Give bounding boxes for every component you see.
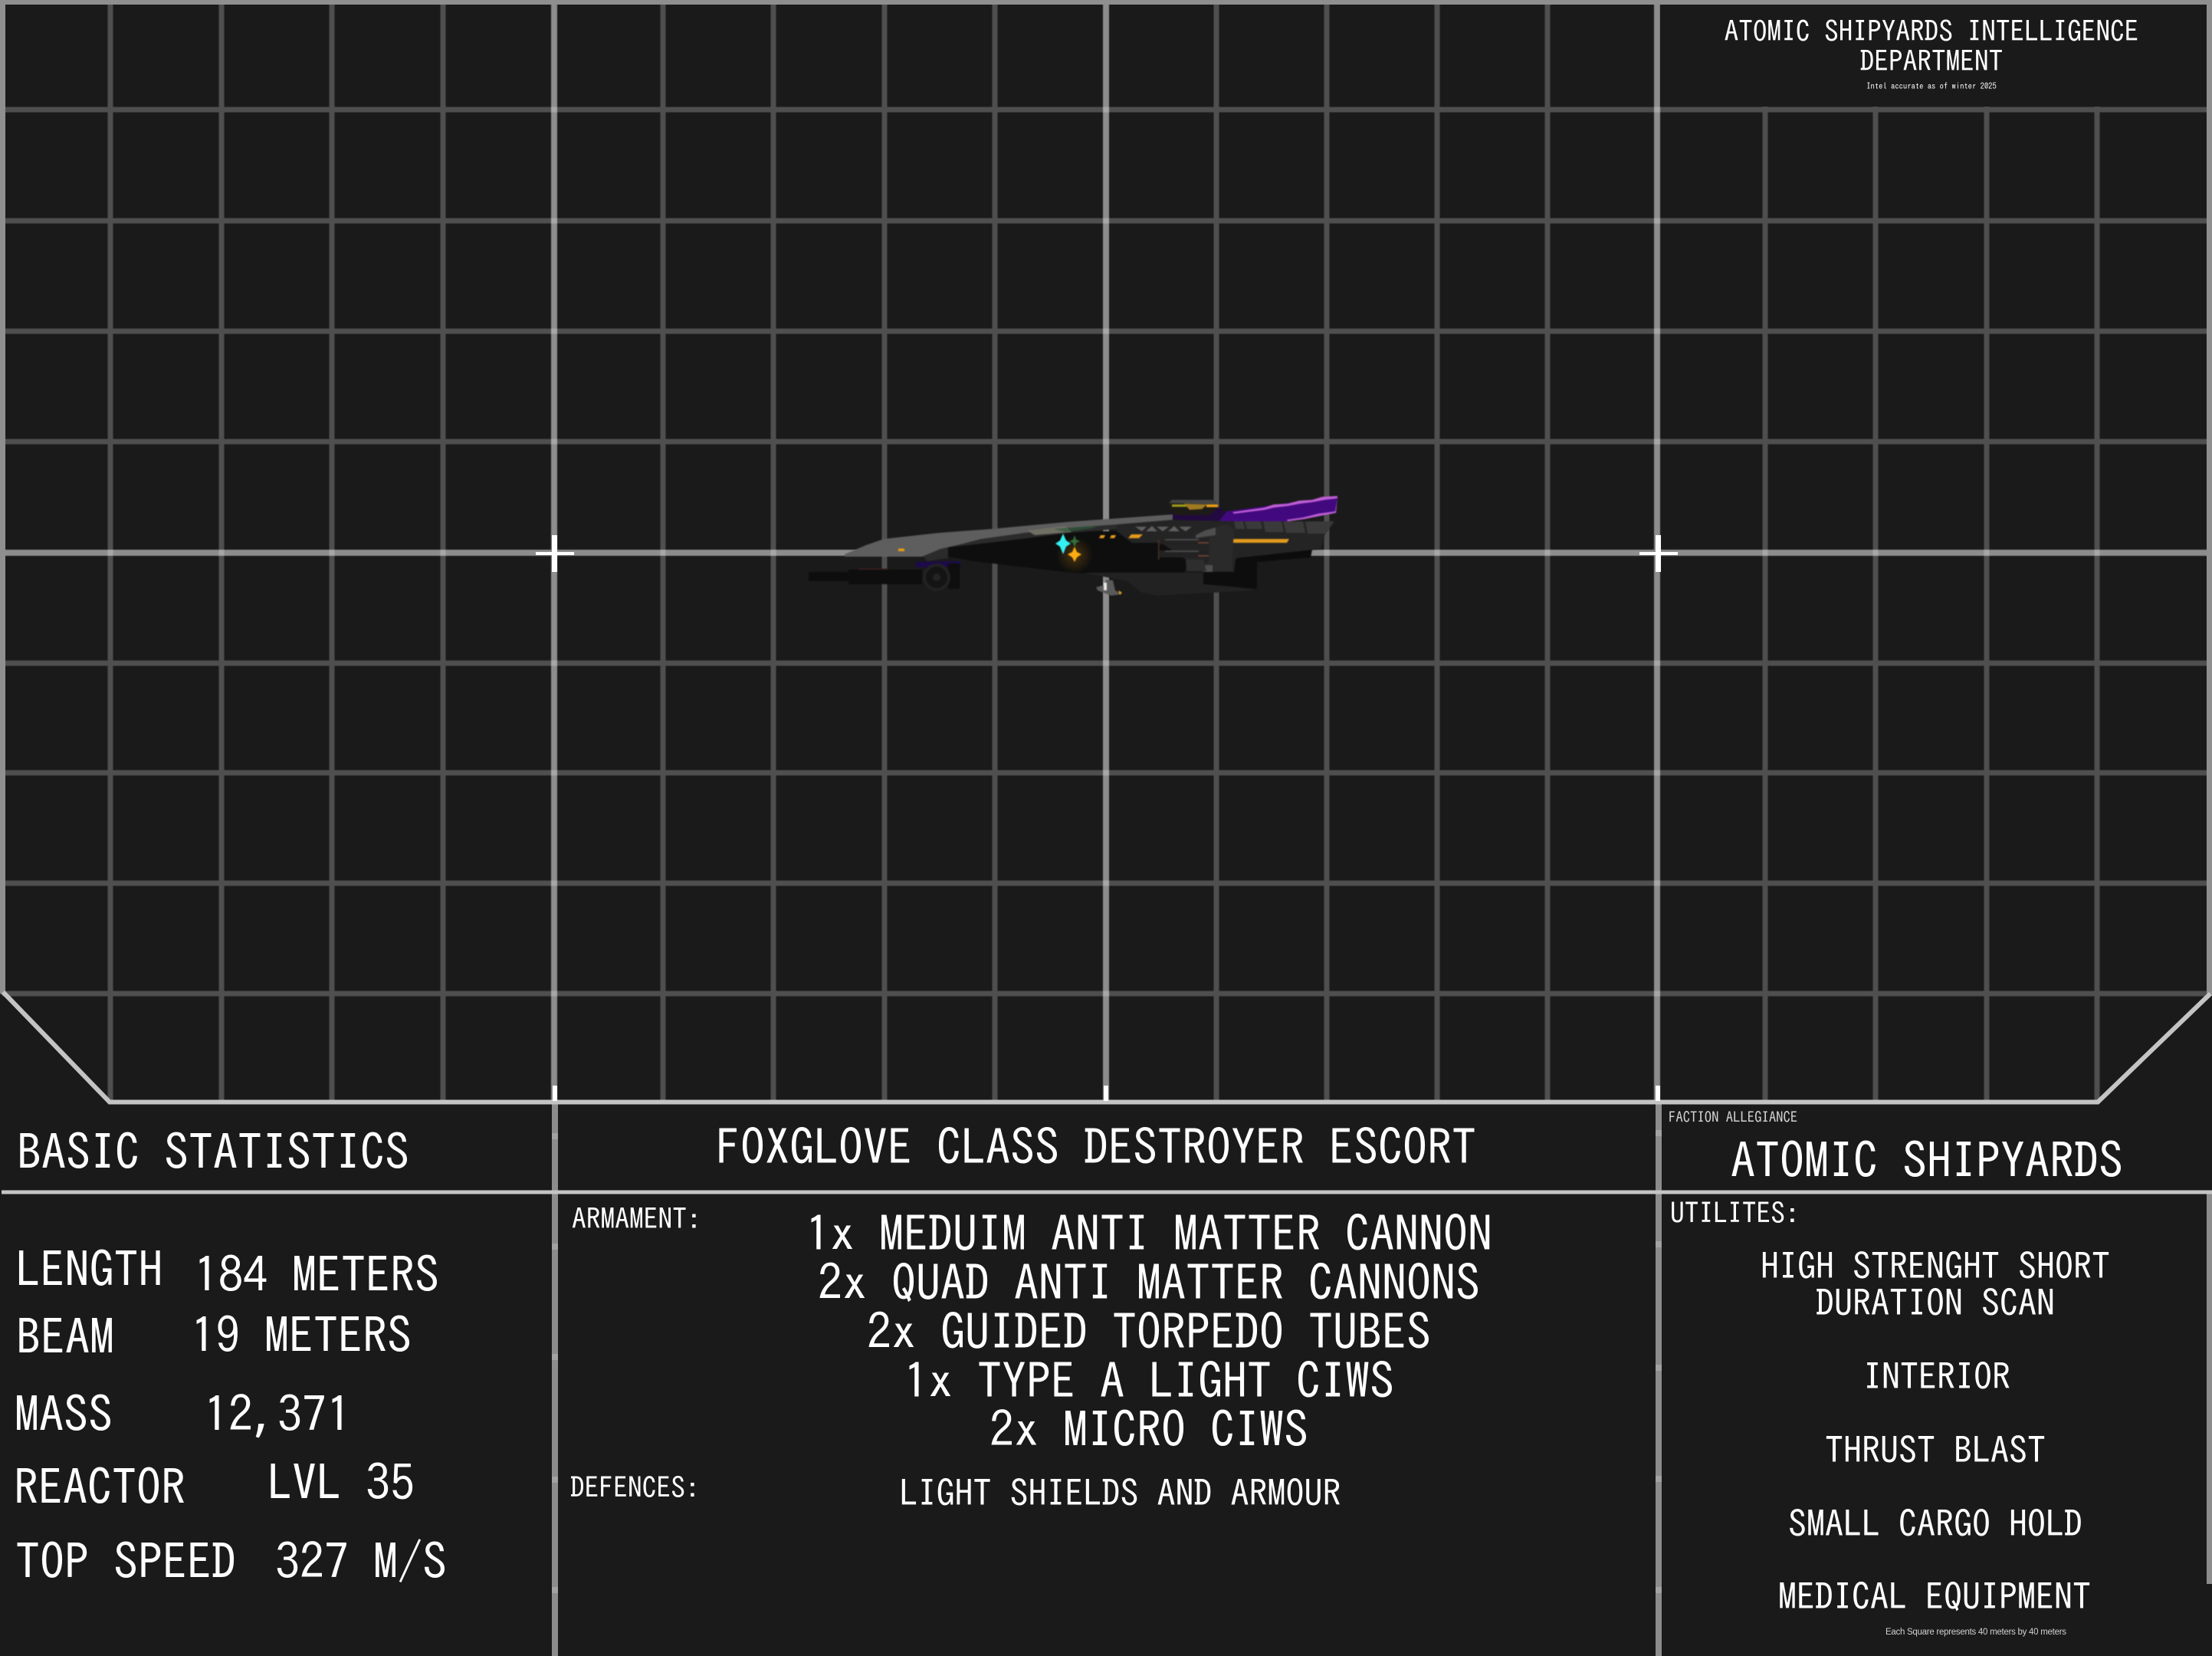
grey dorsal blade [845, 514, 1173, 557]
forward armoured block [1186, 524, 1234, 573]
aft hull underside [1236, 550, 1312, 567]
utilities list [1761, 1247, 2110, 1615]
stat: beam [16, 1310, 412, 1361]
armament list: 2x MICRO CIWS [989, 1405, 1308, 1454]
aft hull plating [1234, 521, 1334, 534]
defences label: DEFENCES: [570, 1473, 700, 1502]
armament list [806, 1208, 1492, 1454]
stat: reactor: LVL 35 [267, 1457, 415, 1506]
hull orange lights [1099, 534, 1289, 586]
dorsal triangles [1135, 526, 1192, 531]
ventral small craft [1096, 580, 1122, 596]
outer frame [0, 0, 2212, 995]
stat: beam: 19 METERS [191, 1310, 412, 1359]
ship class title: FOXGLOVE CLASS DESTROYER ESCORT [716, 1122, 1476, 1171]
panel: faction and utilities [1669, 1111, 2123, 1637]
armament list: 1x TYPE A LIGHT CIWS [904, 1355, 1394, 1405]
stat: reactor: REACTOR [14, 1462, 185, 1511]
department title [1725, 17, 2138, 75]
faction label: FACTION ALLEGIANCE [1669, 1111, 1797, 1125]
stat: length: LENGTH [15, 1244, 162, 1293]
stat: top speed: TOP SPEED [15, 1536, 236, 1585]
faction name: ATOMIC SHIPYARDS [1731, 1135, 2123, 1184]
stat: reactor [14, 1457, 415, 1511]
stat: length [15, 1244, 439, 1299]
stat: top speed: 327 M/S [275, 1536, 447, 1585]
dorsal turret [1167, 500, 1226, 521]
panel: basic statistics [14, 1127, 447, 1585]
header: intelligence department [1660, 5, 2207, 107]
forward gun mount [809, 561, 960, 590]
twin cannons [1158, 539, 1209, 560]
armament list: 2x QUAD ANTI MATTER CANNONS [818, 1257, 1480, 1306]
stepped mid hull [922, 523, 1117, 561]
utilities list: DURATION SCAN [1816, 1284, 2055, 1321]
scale note: Each Square represents 40 meters by 40 meters [1885, 1628, 2066, 1637]
intel date note: Intel accurate as of winter 2025 [1866, 83, 1997, 90]
stat: beam: BEAM [16, 1312, 114, 1361]
utilities list: THRUST BLAST [1825, 1431, 2046, 1468]
defences value: LIGHT SHIELDS AND ARMOUR [900, 1474, 1341, 1511]
bottom panel background [0, 1102, 2212, 1656]
upper hull [1117, 520, 1335, 572]
armament label: ARMAMENT: [572, 1204, 701, 1233]
lower hull [1083, 573, 1257, 596]
stat: mass [15, 1389, 351, 1438]
bottom corner masks [0, 994, 2212, 1102]
stat: mass: MASS [15, 1389, 113, 1438]
panel dividers [2, 992, 2212, 1656]
utilities list: SMALL CARGO HOLD [1788, 1505, 2082, 1542]
crosshair markers [536, 535, 1678, 1101]
stat: length: 184 METERS [194, 1250, 439, 1299]
panel: class and armament [570, 1122, 1492, 1511]
utilities list: MEDICAL EQUIPMENT [1778, 1578, 2091, 1615]
utilities list: INTERIOR [1863, 1358, 2010, 1395]
scale grid [0, 0, 2212, 1102]
utilities list: HIGH STRENGHT SHORT [1761, 1247, 2110, 1284]
purple tail fin [1196, 496, 1337, 521]
orange and cyan sparkle lights [1055, 534, 1093, 573]
starship side profile [809, 496, 1337, 596]
utilities label: UTILITES: [1670, 1198, 1800, 1227]
department title: ATOMIC SHIPYARDS INTELLIGENCE [1725, 17, 2138, 46]
stat: mass: 12,371 [204, 1389, 351, 1438]
department title: DEPARTMENT [1860, 48, 2003, 75]
stat: top speed [15, 1536, 447, 1585]
heading: basic statistics: BASIC STATISTICS [17, 1127, 409, 1176]
armament list: 2x GUIDED TORPEDO TUBES [867, 1306, 1431, 1355]
armament list: 1x MEDUIM ANTI MATTER CANNON [806, 1208, 1492, 1257]
black central hull [948, 531, 1203, 577]
